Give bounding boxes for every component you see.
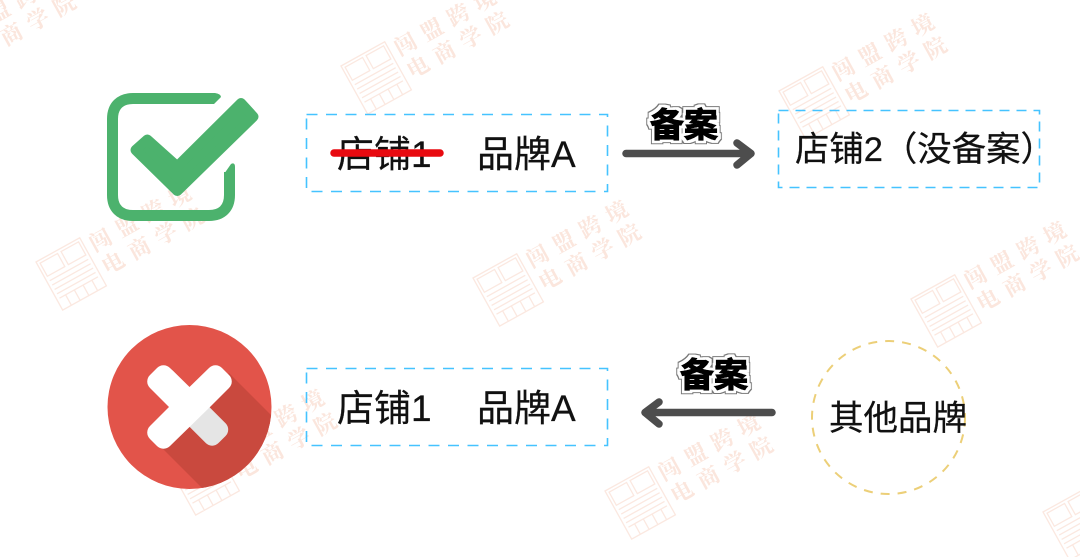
long shadow [163,373,272,488]
watermark: bottom row middle: 闯盟跨境 [654,405,772,486]
watermark: middle row left [36,176,217,310]
watermark: top row right [779,5,960,139]
text: store 1: 店铺1 [337,388,432,429]
icon: green check mark in box [112,93,254,216]
watermark: middle row right [911,213,1080,347]
watermark: bottom row right [1043,426,1080,557]
strike-through line [334,149,440,157]
text: store 2 not filed: 店铺2（没备案） [795,131,1055,169]
watermark: bottom row middle: 电商学院 [667,428,784,508]
watermark: top row left [0,0,89,96]
label: filing, top: 备案 [650,107,718,145]
watermark: bottom row middle [605,405,786,539]
panel: other brands circle [812,341,967,494]
cross lower-right arm [147,365,232,449]
text: brand A: 品牌A [477,388,576,429]
watermark: middle row middle: 电商学院 [535,215,652,295]
panel: store 1 brand A, top [306,114,608,192]
label: filing, bottom: 备案 [680,357,748,395]
watermark: top row right: 电商学院 [841,28,958,108]
watermark: bottom row left: 电商学院 [231,404,348,484]
watermark: top row middle: 电商学院 [403,3,520,83]
cross white arms [147,365,232,449]
watermark: bottom row left [169,381,350,515]
panel: store 1 brand A, bottom [306,368,608,446]
watermark: top row right: 闯盟跨境 [828,5,946,86]
panel: store 2 not filed [778,110,1055,188]
watermark: middle row left: 电商学院 [98,199,215,279]
watermark: top row middle [341,0,522,114]
watermark: middle row left: 闯盟跨境 [85,176,203,257]
arrow: bottom, pointing left [645,402,772,424]
text: other brands: 其他品牌 [829,400,967,438]
watermark: middle row middle [473,192,654,326]
text: store 1: 店铺1 [337,134,432,175]
arrow: top, pointing right [626,143,751,165]
watermark: bottom row left: 闯盟跨境 [218,381,336,462]
text: brand A: 品牌A [477,134,576,175]
icon: red cross in circle [108,325,272,489]
watermark: middle row right: 闯盟跨境 [960,213,1078,294]
watermark: middle row middle: 闯盟跨境 [522,192,640,273]
